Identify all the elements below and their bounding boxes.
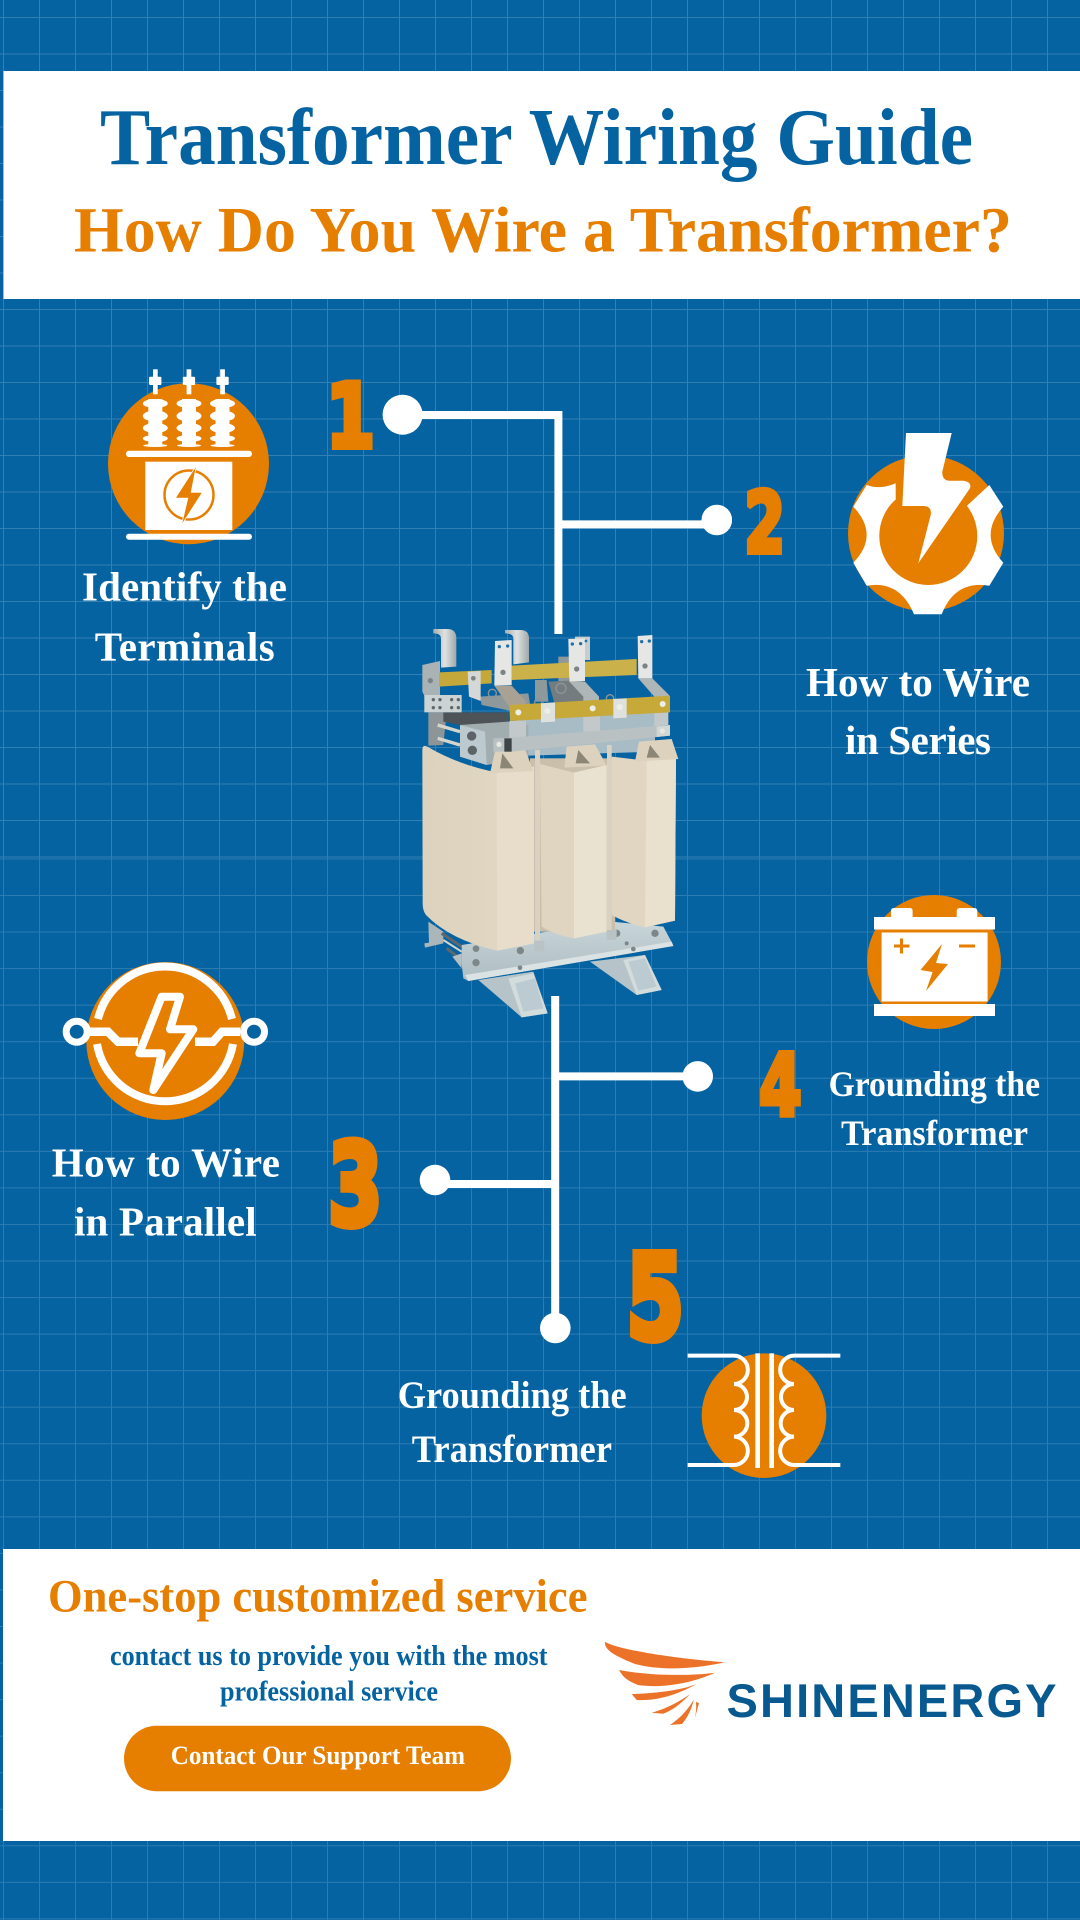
coil: left <box>422 746 534 951</box>
text: how to wire in series: in Series <box>845 717 991 763</box>
subtitle: How Do You Wire a Transformer? <box>74 194 1012 266</box>
coil: left front face <box>497 767 534 951</box>
transformer rear: hooks, core and bus bars <box>422 629 669 765</box>
step 1 number: 1 <box>326 365 375 468</box>
rod end blocks <box>534 930 617 952</box>
step 5 number: 5 <box>626 1230 684 1366</box>
text: grounding the transformer (right): Grounding the <box>829 1064 1040 1104</box>
text: how to wire in series: How to Wire <box>806 659 1030 705</box>
text: how to wire in parallel: in Parallel <box>74 1199 257 1245</box>
coil: right front face <box>645 754 676 927</box>
connector lines: lower tree <box>420 996 713 1343</box>
text: grounding the transformer (bottom): Transformer <box>412 1428 612 1471</box>
icon: transformer with insulators <box>108 369 269 544</box>
transformer front: bus bar, clamp rail, straps <box>490 696 678 773</box>
panel: header banner <box>4 71 1080 299</box>
transformer illustration <box>422 629 678 1017</box>
text: how to wire in parallel <box>52 1140 280 1245</box>
icon: transformer coil symbol <box>688 1353 840 1478</box>
contact button <box>124 1726 511 1791</box>
footer heading: One-stop customized service <box>48 1571 588 1623</box>
transformer base and feet <box>424 922 673 1017</box>
footer description: contact us to provide you with the most <box>110 1641 548 1672</box>
contact button: Contact Our Support Team <box>171 1741 465 1770</box>
footer description: professional service <box>220 1677 438 1708</box>
logo: shinenergy: SHINENERGY <box>726 1674 1056 1727</box>
step 2 number: 2 <box>744 474 785 572</box>
logo: shinenergy <box>605 1642 1056 1727</box>
text: identify the terminals: Terminals <box>95 624 275 670</box>
coil: middle <box>540 764 607 938</box>
coil: middle front face <box>574 765 607 938</box>
title: Transformer Wiring Guide <box>100 94 973 182</box>
icon: battery <box>867 895 1001 1029</box>
transformer coils <box>422 745 676 951</box>
text: identify the terminals: Identify the <box>82 563 287 609</box>
footer description <box>110 1641 548 1708</box>
step 4 number: 4 <box>760 1037 802 1136</box>
text: how to wire in series <box>806 659 1030 763</box>
text: grounding the transformer (bottom) <box>398 1374 627 1471</box>
coil: right <box>612 754 676 927</box>
text: identify the terminals <box>82 563 287 670</box>
connector lines: upper tree <box>383 395 732 634</box>
text: grounding the transformer (right): Transformer <box>841 1113 1028 1153</box>
panel: footer contact <box>3 1549 1080 1841</box>
icon: gear with lightning bolt <box>848 433 1004 614</box>
icon: parallel wiring bolt <box>66 962 264 1120</box>
tie rods <box>535 745 612 942</box>
step 3 number: 3 <box>328 1120 382 1252</box>
text: grounding the transformer (right) <box>829 1064 1040 1153</box>
text: grounding the transformer (bottom): Grounding the <box>398 1374 627 1417</box>
text: how to wire in parallel: How to Wire <box>52 1140 280 1186</box>
